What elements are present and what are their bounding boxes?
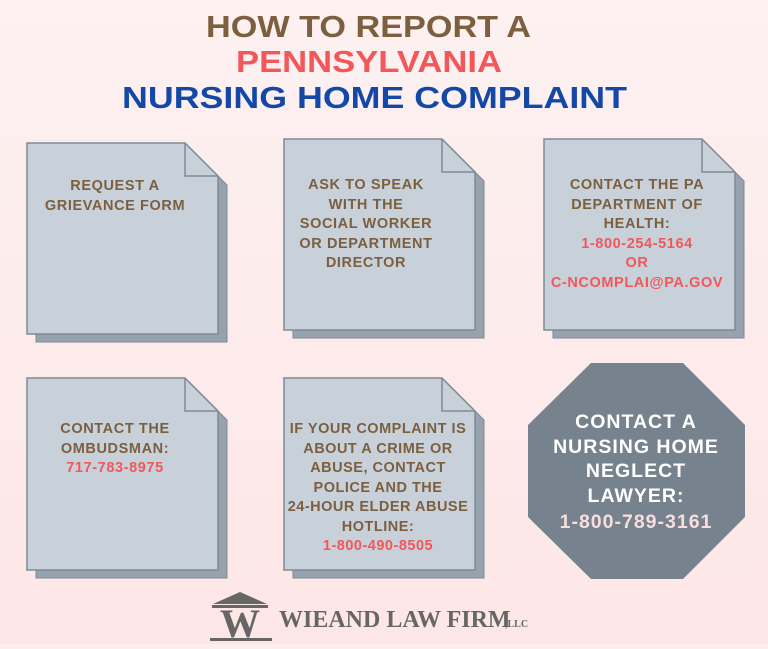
- title: HOW TO REPORT A: [206, 9, 531, 44]
- panel: ombudsman: OMBUDSMAN:: [61, 441, 169, 457]
- panel: crime or abuse: HOTLINE:: [342, 519, 414, 535]
- panel: request grievance form: REQUEST A: [70, 178, 160, 194]
- panel: crime or abuse: 24-HOUR ELDER ABUSE: [288, 499, 468, 515]
- octagon: lawyer: NEGLECT: [586, 460, 686, 482]
- panel: PA department of health: DEPARTMENT OF: [571, 197, 703, 213]
- logo: [210, 592, 528, 646]
- panel: PA department of health: 1-800-254-5164: [581, 236, 693, 252]
- panel: PA department of health: HEALTH:: [604, 216, 670, 232]
- octagon: lawyer: NURSING HOME: [553, 436, 719, 458]
- octagon: lawyer: [528, 363, 745, 579]
- panel: crime or abuse: ABOUT A CRIME OR: [303, 441, 453, 457]
- panel: social worker: SOCIAL WORKER: [300, 216, 432, 232]
- panel: ombudsman: [27, 378, 227, 578]
- panel: social worker: WITH THE: [329, 197, 403, 213]
- panel: social worker: DIRECTOR: [326, 255, 406, 271]
- panel: ombudsman: 717-783-8975: [66, 460, 164, 476]
- panel: ombudsman: CONTACT THE: [60, 421, 170, 437]
- title: NURSING HOME COMPLAINT: [122, 80, 627, 115]
- octagon: lawyer: 1-800-789-3161: [560, 511, 712, 533]
- octagon: lawyer: CONTACT A: [575, 411, 697, 433]
- panel: crime or abuse: [284, 378, 484, 578]
- panel: PA department of health: CONTACT THE PA: [570, 177, 704, 193]
- panel: social worker: [284, 139, 484, 338]
- logo: ,LLC: [505, 619, 528, 630]
- panel: PA department of health: [544, 139, 744, 338]
- panel: social worker: OR DEPARTMENT: [299, 236, 433, 252]
- title: [122, 9, 627, 115]
- panel: crime or abuse: ABUSE, CONTACT: [310, 460, 446, 476]
- octagon: lawyer: LAWYER:: [588, 485, 684, 507]
- panel: social worker: ASK TO SPEAK: [308, 177, 424, 193]
- panel: PA department of health: C-NCOMPLAI@PA.GOV: [551, 275, 723, 291]
- panel: crime or abuse: 1-800-490-8505: [323, 538, 433, 554]
- title: PENNSYLVANIA: [236, 44, 502, 79]
- panel: crime or abuse: POLICE AND THE: [314, 480, 442, 496]
- panel: crime or abuse: IF YOUR COMPLAINT IS: [290, 421, 466, 437]
- panel: request grievance form: GRIEVANCE FORM: [45, 198, 185, 214]
- logo: WIEAND LAW FIRM: [279, 607, 511, 633]
- panel: request grievance form: [27, 143, 227, 342]
- panel: PA department of health: OR: [626, 255, 648, 271]
